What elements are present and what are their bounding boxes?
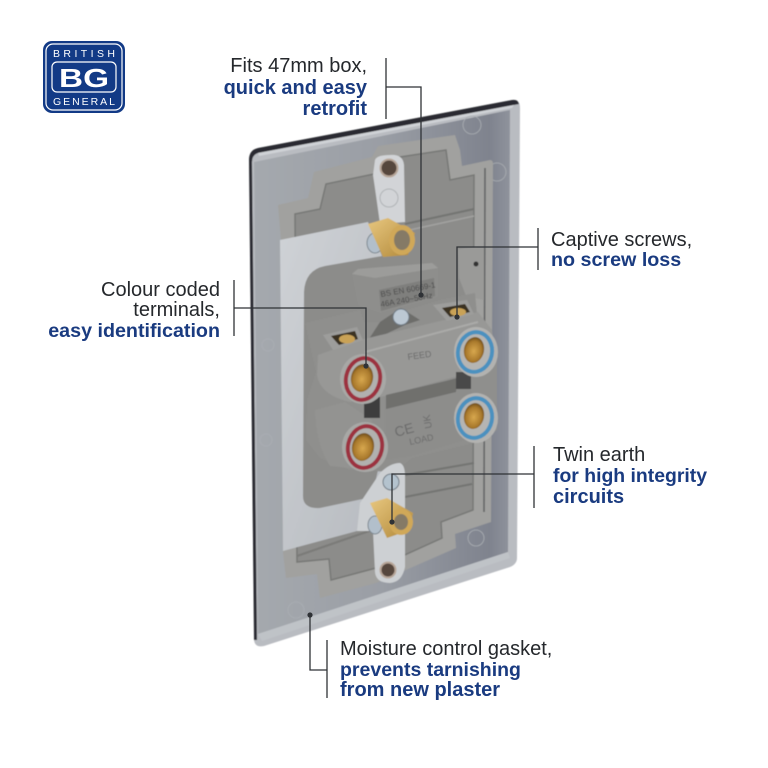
text marks on terminals: FEED (407, 349, 433, 362)
callout: fits 47mm box: Fits 47mm box, (230, 55, 367, 77)
callout: fits 47mm box (224, 55, 424, 298)
callout: moisture control gasket: from new plaster (340, 679, 500, 701)
callout: moisture control gasket (307, 612, 552, 701)
product: socket rear view: CE (393, 419, 416, 440)
logo: British General: GENERAL (53, 96, 115, 108)
lower bridge (385, 378, 480, 460)
callout: moisture control gasket: prevents tarnishing (340, 659, 521, 681)
callout: twin earth: Twin earth (553, 444, 645, 466)
live terminals: red (340, 353, 388, 473)
plate knock-out marks (260, 116, 506, 618)
callout: fits 47mm box: retrofit (303, 98, 367, 120)
bottom earth strap (357, 463, 413, 583)
neutral terminals: blue (452, 327, 498, 443)
callout: colour coded terminals: terminals, (133, 299, 220, 321)
product: socket rear view: LOAD (408, 432, 435, 447)
upper bridge (317, 312, 495, 402)
logo: British General: BRITISH (53, 48, 115, 60)
terminal screws (323, 300, 474, 350)
callout: fits 47mm box: quick and easy (224, 77, 368, 99)
callout: captive screws (454, 228, 692, 320)
right tab (458, 246, 484, 300)
product: socket rear view: 46A 240~50Hz (380, 291, 433, 309)
back plate (249, 100, 520, 646)
top earth strap (367, 155, 415, 257)
callout: captive screws: no screw loss (551, 249, 681, 271)
terminal block body (305, 293, 497, 472)
product: socket rear view: BS EN 60669-1 (380, 280, 437, 299)
central cover (352, 263, 438, 313)
callout: captive screws: Captive screws, (551, 229, 692, 251)
callout: moisture control gasket: Moisture control gasket, (340, 638, 552, 660)
callout: colour coded terminals (48, 279, 369, 369)
callout: colour coded terminals: easy identification (48, 320, 220, 342)
metal frame (280, 222, 398, 551)
logo: British General: BG (59, 63, 109, 93)
central screw (393, 309, 409, 325)
logo: British General (43, 41, 125, 113)
product: socket rear view (249, 100, 520, 646)
callout: twin earth (389, 444, 707, 525)
product: socket rear view: UK (422, 413, 435, 429)
callout: colour coded terminals: Colour coded (101, 279, 220, 301)
callout: twin earth: for high integrity (553, 465, 707, 487)
grey gasket housing (278, 135, 493, 598)
callout: twin earth: circuits (553, 486, 624, 508)
